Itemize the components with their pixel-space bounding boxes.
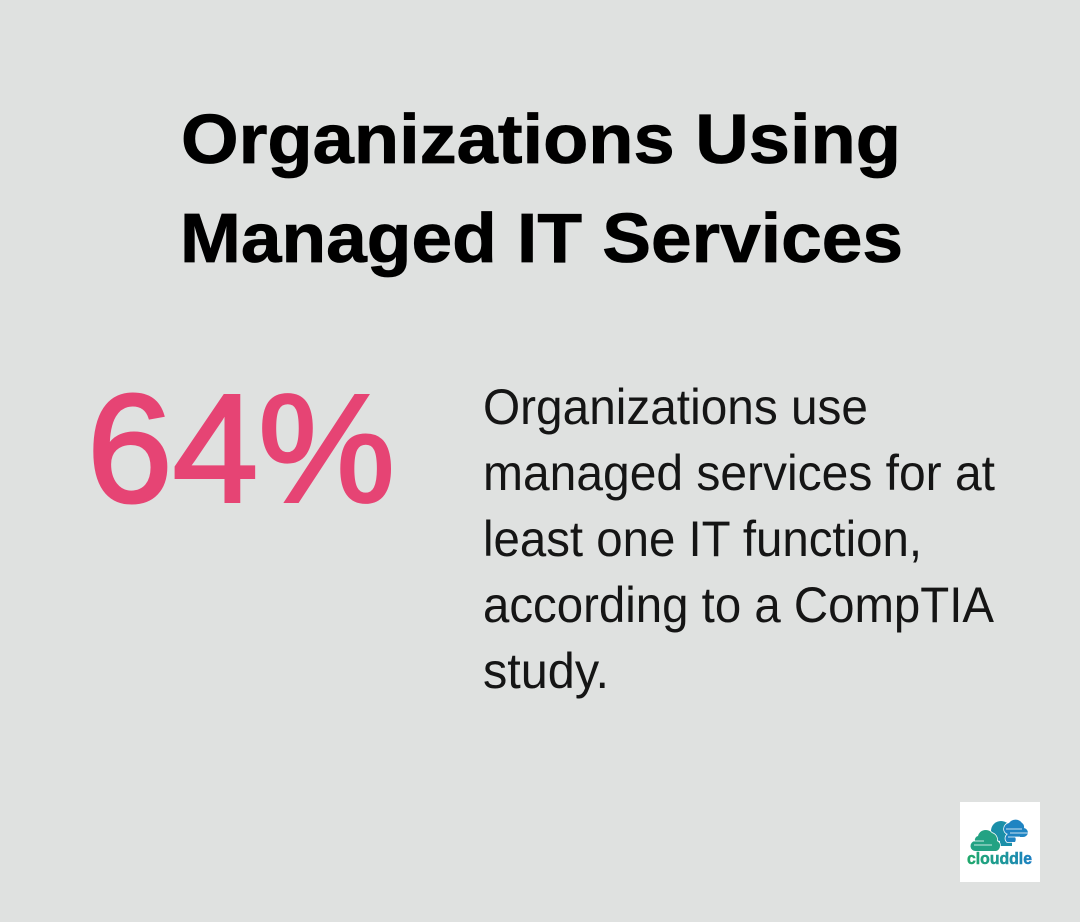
big statistic: 64%: 64%: [87, 362, 395, 534]
icon: left green cloud: [970, 830, 1000, 851]
title: [180, 100, 903, 277]
icon: small middle cloud: [991, 821, 1012, 846]
title: Organizations Using: [181, 100, 901, 178]
description text: least one IT function,: [483, 511, 922, 567]
icon: cloud circuit lines: [972, 829, 1028, 845]
description text: managed services for at: [483, 445, 995, 501]
logo wordmark: clouddle: [967, 850, 1032, 868]
logo: clouddle: [960, 802, 1040, 882]
description text: Organizations use: [483, 379, 868, 435]
title: Managed IT Services: [180, 199, 903, 277]
description text: according to a CompTIA: [483, 577, 995, 633]
description text: [483, 379, 995, 699]
icon: right blue cloud: [1004, 820, 1028, 842]
description text: study.: [483, 643, 609, 699]
